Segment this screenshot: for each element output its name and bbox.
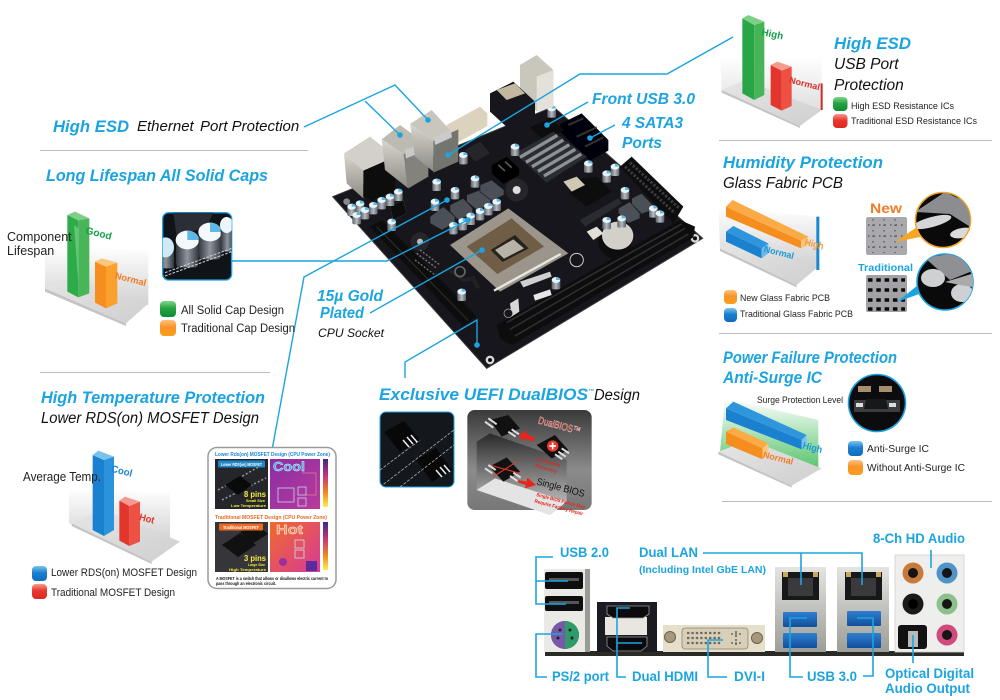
bar chart: humidity: High <box>803 237 825 253</box>
I/O label: Optical Digital Audio Output: Audio Output <box>885 681 970 696</box>
I/O label: PS/2 port: PS/2 port <box>552 669 609 684</box>
heading: Anti-Surge IC <box>722 369 823 387</box>
label: failure note: Single BIOS Failure May <box>535 492 586 511</box>
LAN and USB 3.0 stack 1 <box>775 567 826 652</box>
bar chart: ESD: High <box>760 27 784 43</box>
CPU power connector <box>492 157 519 184</box>
rear port: HDMI <box>490 82 535 130</box>
label: Single BIOS: Single BIOS <box>535 477 586 500</box>
rear port: LAN tower 1 <box>344 137 395 201</box>
chips and small parts <box>570 177 612 207</box>
MOSFET chokes <box>430 180 653 230</box>
label: failure note: Require Factory Repair <box>534 499 584 517</box>
base PCB strip <box>545 651 964 656</box>
thermal image: cool: Cool <box>273 459 305 474</box>
subheading: Glass Fabric PCB <box>723 175 843 192</box>
label: CPU Socket: CPU Socket <box>318 326 385 340</box>
legend: High ESD Resistance ICs <box>851 101 954 112</box>
bar chart: ESD: Normal <box>788 75 821 92</box>
panel: High Temperature Protection <box>23 388 265 599</box>
I/O callout lines <box>536 550 931 677</box>
magnified fibre: new <box>911 192 975 248</box>
subheading: Protection <box>834 77 904 94</box>
card footnote: A MOSFET is a switch that allows or disallows electric current to <box>216 576 328 581</box>
axis label: Component <box>7 230 72 244</box>
heading: High ESD: High ESD <box>53 117 129 136</box>
bar chart: surge protection: High <box>801 441 823 456</box>
label: DualBIOS: DualBIOS™ <box>537 416 582 437</box>
legend: Traditional Cap Design <box>181 323 295 335</box>
subheading: USB Port <box>834 56 899 73</box>
rear port: USB tower <box>520 55 553 112</box>
bar chart: average temperature <box>69 451 180 564</box>
label: Front USB 3.0: Front USB 3.0 <box>592 91 695 108</box>
label: 15µ Gold Plated: Plated <box>320 305 365 322</box>
line: DualBIOS <box>405 320 477 378</box>
I/O label: Optical Digital Audio Output: Optical Digital <box>885 666 974 681</box>
heading: Long Lifespan All Solid Caps <box>46 167 268 185</box>
USB and PS/2 bracket <box>544 569 590 652</box>
card title: traditional: Traditional MOSFET Design (CPU Power Zone) <box>215 515 327 521</box>
pointer wedges <box>895 227 920 242</box>
line: ethernet ESD <box>304 85 428 135</box>
magnified fibre: traditional <box>917 252 978 310</box>
axis label: Surge Protection Level <box>757 395 843 406</box>
I/O label: Dual HDMI: Dual HDMI <box>632 669 698 684</box>
photo: 8 pins: Low Temperature <box>231 504 266 508</box>
thermal image: hot <box>270 522 320 572</box>
line: USB ESD <box>448 37 733 155</box>
photo: 8 pins <box>215 459 268 509</box>
photo: BIOS chips <box>380 412 454 487</box>
weave: new fabric <box>866 217 907 255</box>
heading: Exclusive UEFI DualBIOS <box>379 385 589 404</box>
legend: Without Anti-Surge IC <box>867 462 965 474</box>
chip: main BIOS <box>485 415 520 437</box>
pointer wedge <box>897 285 922 302</box>
Dual HDMI ports <box>597 602 657 652</box>
photo: 3 pins: Traditional MOSFET <box>223 525 259 530</box>
I/O label: DVI-I: DVI-I <box>734 669 765 684</box>
panel: High ESD Ethernet <box>40 117 308 150</box>
panel: High ESD USB Port Protection <box>719 15 992 141</box>
legend <box>32 566 197 599</box>
axis label: Lifespan <box>7 244 54 258</box>
text: Ethernet Port Protection: Ethernet <box>137 118 195 135</box>
I/O label: Dual LAN: Dual LAN <box>639 545 698 560</box>
callout lines <box>232 37 733 450</box>
I/O label: USB 3.0: USB 3.0 <box>807 669 857 684</box>
line: CPU socket <box>370 250 482 313</box>
bar chart: component lifespan: Normal <box>114 271 147 288</box>
label: Traditional: Traditional <box>858 262 913 274</box>
label: 4 SATA3 Ports: 4 SATA3 <box>621 115 683 132</box>
legend: Lower RDS(on) MOSFET Design <box>51 567 197 579</box>
label: New: New <box>870 200 902 216</box>
I/O label: USB 2.0: USB 2.0 <box>560 545 609 560</box>
temperature scale <box>323 522 328 570</box>
legend <box>160 301 295 336</box>
thermal image: cool <box>270 459 320 509</box>
temperature scale <box>323 459 328 507</box>
line: SATA <box>590 125 615 138</box>
bar chart: component lifespan: Good <box>84 226 113 243</box>
label: recovery note: Recovery <box>534 463 558 475</box>
motherboard photo <box>333 55 703 368</box>
legend <box>724 290 853 322</box>
heading: High Temperature Protection <box>41 388 265 407</box>
DVI-I port <box>663 625 765 652</box>
legend: Traditional ESD Resistance ICs <box>851 116 977 127</box>
weave: traditional fabric <box>866 275 907 312</box>
legend <box>848 441 965 475</box>
legend <box>833 97 977 128</box>
heading: ™ <box>588 388 594 395</box>
bar chart: ESD <box>720 15 823 128</box>
rear I/O panel <box>536 531 974 696</box>
photo: 8 pins: Small Size <box>246 499 265 503</box>
legend: New Glass Fabric PCB <box>740 293 830 304</box>
SATA connectors <box>560 113 608 161</box>
bar chart: average temperature: Hot <box>138 512 156 527</box>
I/O label: 8-Ch HD Audio: 8-Ch HD Audio <box>873 531 965 546</box>
line: Front USB <box>547 102 588 125</box>
heatsink <box>515 132 587 183</box>
chip: single BIOS <box>485 457 521 482</box>
subheading: Lower RDS(on) MOSFET Design <box>41 410 259 427</box>
photo: 8 pins: Lower RDS(on) MOSFET <box>221 462 262 467</box>
CPU socket <box>450 208 568 292</box>
line: solid caps <box>232 220 468 261</box>
photo: 3 pins <box>215 522 268 572</box>
legend: Traditional Glass Fabric PCB <box>740 309 853 320</box>
heading: Humidity Protection <box>723 153 883 172</box>
card: MOSFET comparison <box>208 448 336 588</box>
panel: Long Lifespan All Solid Caps <box>7 167 295 336</box>
ATX connector <box>620 157 683 223</box>
text: Ethernet Port Protection: Port Protection <box>200 118 299 135</box>
bar chart: humidity: Normal <box>763 244 795 261</box>
chip: backup BIOS <box>537 435 569 459</box>
label: 15µ Gold Plated: 15µ Gold <box>317 288 384 305</box>
arrow: failure <box>518 477 536 488</box>
photo: 3 pins: High Temperature <box>229 568 266 572</box>
line: MOSFET <box>272 200 447 450</box>
photo: anti-surge IC <box>848 374 906 432</box>
bar chart: component lifespan <box>45 212 148 326</box>
legend: All Solid Cap Design <box>181 305 284 317</box>
heading: Power Failure Protection <box>723 349 897 367</box>
legend: Traditional MOSFET Design <box>51 587 175 599</box>
rear port: LAN tower 3 <box>410 110 458 173</box>
label: 4 SATA3 Ports: Ports <box>622 135 662 152</box>
thermal image: hot: Hot <box>276 522 304 537</box>
bar chart: surge protection: Normal <box>762 450 794 467</box>
bar chart: humidity <box>718 200 825 287</box>
PCIe slot <box>370 220 477 326</box>
heading: High ESD <box>834 34 911 53</box>
bar chart: surge protection <box>718 398 823 488</box>
front USB connector <box>530 118 564 141</box>
I/O label: Dual LAN: (Including Intel GbE LAN) <box>639 564 766 576</box>
capacitors <box>347 105 664 301</box>
rear port: LAN tower 2 <box>382 125 428 188</box>
panel: Power Failure Protection <box>718 349 992 502</box>
panel: Humidity Protection <box>718 153 992 334</box>
card title: lower RDS: Lower Rds(on) MOSFET Design (CPU Power Zone) <box>215 452 330 458</box>
diagram: DualBIOS vs single BIOS <box>467 410 592 517</box>
rear port: DVI <box>447 107 487 145</box>
PS/2 connector <box>551 621 579 649</box>
LAN and USB 3.0 stack 2 <box>837 567 889 652</box>
label: recovery note: Automatic <box>536 457 561 469</box>
heading: Design <box>594 387 640 404</box>
RAM slots <box>497 220 695 345</box>
photo: 3 pins: Large Size <box>248 563 265 567</box>
card footnote: pass through an electronic circuit. <box>216 581 276 586</box>
audio jacks <box>895 555 964 652</box>
panel: UEFI DualBIOS <box>379 385 640 517</box>
callout dots <box>397 117 593 348</box>
board PCB <box>333 107 703 368</box>
photo: solid capacitors <box>157 213 234 280</box>
axis label: Average Temp. <box>23 469 101 484</box>
photo: 8 pins: 8 pins <box>244 490 267 499</box>
photo: 3 pins: 3 pins <box>244 554 267 563</box>
arrow: recovery <box>518 431 535 442</box>
coin battery <box>598 225 632 258</box>
legend: Anti-Surge IC <box>867 443 929 455</box>
bar chart: average temperature: Cool <box>110 464 134 480</box>
board labels <box>317 91 695 340</box>
